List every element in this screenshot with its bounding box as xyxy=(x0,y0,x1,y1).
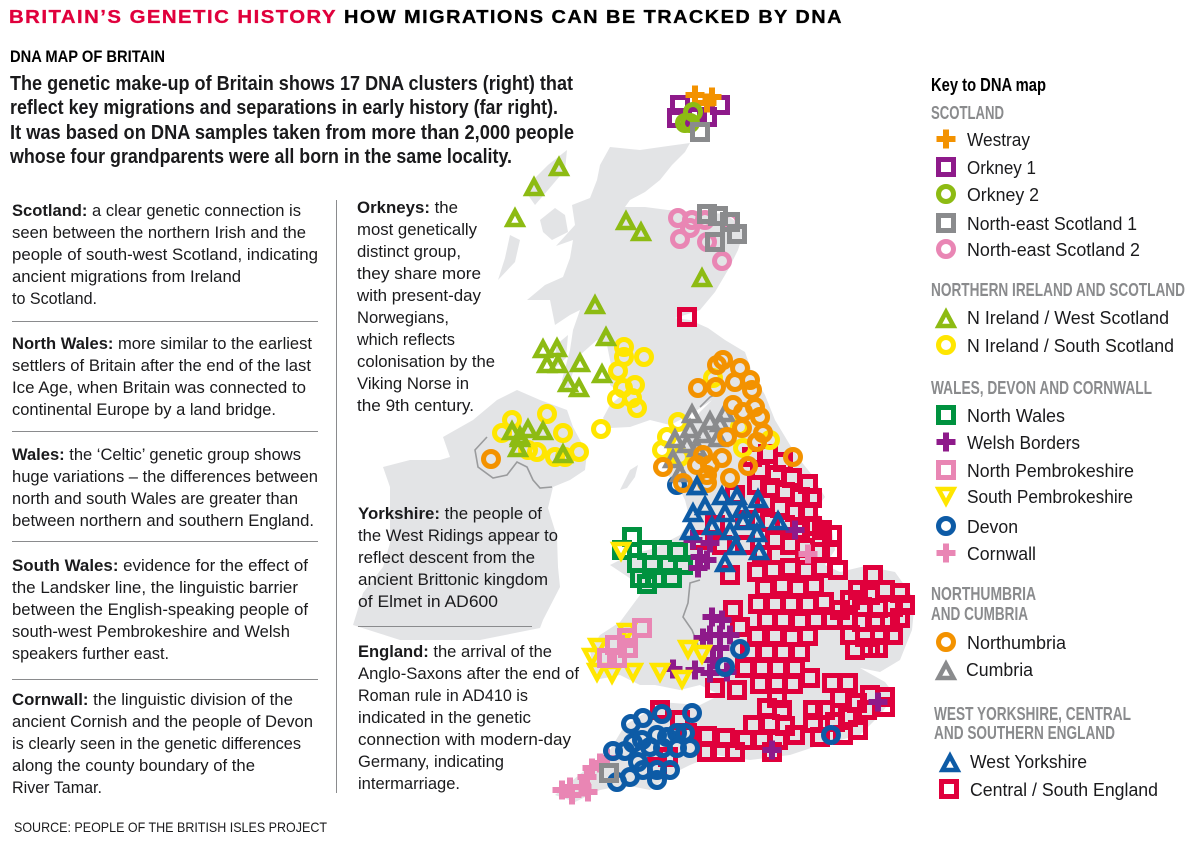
text block: England xyxy=(358,642,579,793)
legend group: Wales, Devon and Cornwall: South Pembrokeshire xyxy=(967,487,1133,507)
legend group: Wales, Devon and Cornwall: North Wales xyxy=(967,406,1065,426)
text block: Wales xyxy=(12,445,318,530)
map: North Wales markers xyxy=(614,530,690,592)
legend group: Northumbria and Cumbria xyxy=(931,584,1067,680)
text block: North Wales: continental Europe by a land bridge. xyxy=(12,400,276,419)
text block: South Wales: south-west Pembrokeshire and Welsh xyxy=(12,622,290,641)
legend group: Northumbria and Cumbria: AND CUMBRIA xyxy=(931,604,1028,624)
legend group: Northern Ireland and Scotland: N Ireland / South Scotland xyxy=(967,336,1174,356)
heading: DNA map of Britain: DNA MAP OF BRITAIN xyxy=(10,47,165,66)
legend: key to DNA map xyxy=(931,75,1185,800)
legend group: Northern Ireland and Scotland: N Ireland / West Scotland xyxy=(967,308,1169,328)
text block: North Wales xyxy=(12,334,312,419)
map: West Yorkshire markers xyxy=(682,479,786,570)
text block: North Wales: North Wales: more similar to the earliest xyxy=(12,334,312,353)
legend group: Wales, Devon and Cornwall: Devon xyxy=(967,517,1018,537)
text block: Yorkshire: the West Ridings appear to xyxy=(358,526,558,545)
text block: Orkneys: Viking Norse in xyxy=(357,374,469,393)
legend group: Scotland: North-east Scotland 2 xyxy=(967,240,1140,260)
text block: Scotland: Scotland: a clear genetic connection is xyxy=(12,201,301,220)
text block: Orkneys: Orkneys: the xyxy=(357,198,458,217)
text block: Wales: huge variations – the differences between xyxy=(12,467,318,486)
text block: Cornwall: along the county boundary of the xyxy=(12,756,255,775)
legend group: Wales, Devon and Cornwall: North Pembrokeshire xyxy=(967,461,1134,481)
text block: Scotland: to Scotland. xyxy=(12,289,97,308)
intro text: The genetic make-up of Britain shows 17 DNA clusters (right) that xyxy=(10,73,573,95)
text block: Orkneys: the 9th century. xyxy=(357,396,474,415)
text block: South Wales: South Wales: evidence for the effect of xyxy=(12,556,308,575)
text block: Orkneys: most genetically xyxy=(357,220,477,239)
legend group: West Yorkshire, Central and Southern England: WEST YORKSHIRE, CENTRAL xyxy=(934,704,1131,724)
map: Northumbria markers xyxy=(484,352,800,490)
title: BRITAIN’S GENETIC HISTORY xyxy=(9,7,337,27)
map: Cornwall markers xyxy=(552,544,818,804)
text block: Cornwall: River Tamar. xyxy=(12,778,102,797)
intro text: reflect key migrations and separations in early history (far right). xyxy=(10,97,558,119)
legend group: Scotland: Westray xyxy=(967,130,1030,150)
text block: North Wales: Ice Age, when Britain was connected to xyxy=(12,378,306,397)
map: North-east Scotland 1 markers xyxy=(602,124,744,780)
legend group: Scotland: Orkney 1 xyxy=(967,158,1036,178)
text block: Yorkshire: of Elmet in AD600 xyxy=(358,592,498,611)
text block: Scotland: people of south-west Scotland, indicating xyxy=(12,245,318,264)
text block: South Wales: speakers further east. xyxy=(12,644,169,663)
text block: Cornwall: ancient Cornish and the people of Devon xyxy=(12,712,313,731)
legend group: West Yorkshire, Central and Southern England: Central / South England xyxy=(970,780,1158,800)
legend group: Scotland xyxy=(931,103,1140,260)
text block: Orkneys xyxy=(356,198,495,415)
legend group: West Yorkshire, Central and Southern England: AND SOUTHERN ENGLAND xyxy=(934,723,1115,743)
map: Orkney 2 markers xyxy=(678,104,700,130)
legend group: Wales, Devon and Cornwall: Welsh Borders xyxy=(967,433,1080,453)
text block: Cornwall: Cornwall: the linguistic division of the xyxy=(12,690,293,709)
map: Welsh Borders markers xyxy=(664,520,888,760)
title: HOW MIGRATIONS CAN BE TRACKED BY DNA xyxy=(344,7,843,27)
legend group: Northumbria and Cumbria: NORTHUMBRIA xyxy=(931,584,1036,604)
text block: England: Roman rule in AD410 is xyxy=(358,686,528,705)
map: North Pembrokeshire markers xyxy=(600,620,650,666)
text block: Scotland xyxy=(12,201,318,308)
text block: England: intermarriage. xyxy=(358,774,460,793)
text block: Orkneys: Norwegians, xyxy=(357,308,449,327)
text block: Wales: Wales: the ‘Celtic’ genetic group shows xyxy=(12,445,301,464)
legend group: West Yorkshire, Central and Southern England xyxy=(934,704,1158,800)
text block: South Wales xyxy=(12,556,308,663)
map: South Pembrokeshire markers xyxy=(584,544,710,686)
text block: Yorkshire: reflect descent from the xyxy=(358,548,535,567)
text block: Orkneys: which reflects xyxy=(356,330,455,349)
text block: Cornwall xyxy=(12,690,313,797)
text block: Cornwall: is clearly seen in the genetic differences xyxy=(12,734,301,753)
map: N Ireland / West Scotland markers xyxy=(504,160,710,461)
legend group: Northumbria and Cumbria: Northumbria xyxy=(967,633,1067,653)
text block: England: England: the arrival of the xyxy=(358,642,552,661)
text block: England: Anglo-Saxons after the end of xyxy=(358,664,579,683)
text block: Wales: between northern and southern England. xyxy=(12,511,314,530)
text block: Yorkshire: Yorkshire: the people of xyxy=(358,504,542,523)
map: Devon markers xyxy=(606,478,838,790)
text block: Orkneys: they share more xyxy=(357,264,481,283)
text block: England: Germany, indicating xyxy=(358,752,504,771)
text block: South Wales: between the English-speaking people of xyxy=(12,600,308,619)
legend group: Scotland: SCOTLAND xyxy=(931,103,1004,123)
text block: Wales: north and south Wales are greater than xyxy=(12,489,298,508)
intro text xyxy=(9,73,574,168)
intro text: whose four grandparents were all born in the same locality. xyxy=(9,146,512,168)
legend group: Northern Ireland and Scotland xyxy=(931,280,1185,356)
legend group: Wales, Devon and Cornwall xyxy=(931,378,1152,564)
text block: Scotland: seen between the northern Irish and the xyxy=(12,223,306,242)
text block: Orkneys: distinct group, xyxy=(357,242,461,261)
text block: Scotland: ancient migrations from Ireland xyxy=(12,267,241,286)
legend group: Northumbria and Cumbria: Cumbria xyxy=(966,660,1034,680)
map: Orkney 1 markers xyxy=(670,98,728,126)
legend group: Scotland: Orkney 2 xyxy=(967,185,1039,205)
intro text: It was based on DNA samples taken from more than 2,000 people xyxy=(10,122,574,144)
legend group: Scotland: North-east Scotland 1 xyxy=(967,214,1137,234)
legend group: West Yorkshire, Central and Southern England: West Yorkshire xyxy=(970,752,1087,772)
text block: Orkneys: colonisation by the xyxy=(357,352,495,371)
map: land of Britain and Ireland xyxy=(353,143,915,802)
legend heading: Key to DNA map xyxy=(931,75,1046,95)
text block: England: connection with modern-day xyxy=(358,730,571,749)
text block: England: indicated in the genetic xyxy=(358,708,531,727)
map: Westray markers xyxy=(686,86,722,112)
title xyxy=(9,7,843,27)
source: SOURCE: PEOPLE OF THE BRITISH ISLES PROJECT xyxy=(14,819,327,835)
map: N Ireland / South Scotland markers xyxy=(494,340,778,464)
text block: South Wales: the Landsker line, the linguistic barrier xyxy=(12,578,298,597)
legend group: Wales, Devon and Cornwall: Cornwall xyxy=(967,544,1036,564)
text block: Orkneys: with present-day xyxy=(356,286,481,305)
map: Cumbria markers xyxy=(666,406,732,480)
map: West Yorkshire marker on top xyxy=(690,479,704,493)
text block: North Wales: settlers of Britain after the end of the last xyxy=(12,356,311,375)
text block: Yorkshire xyxy=(358,504,558,611)
map: Central / South England markers xyxy=(650,310,912,774)
map: North-east Scotland 2 markers xyxy=(670,210,738,268)
text block: Yorkshire: ancient Brittonic kingdom xyxy=(358,570,548,589)
